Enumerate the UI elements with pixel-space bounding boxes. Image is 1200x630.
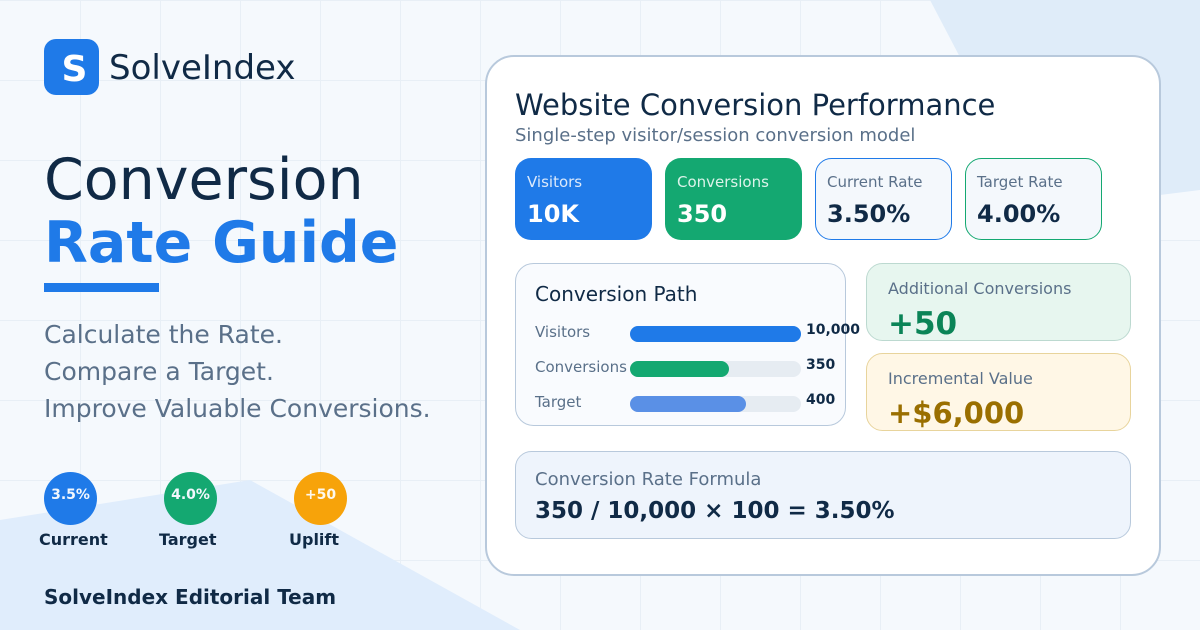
metric: conversions: 350 [677, 200, 727, 228]
stat: target: 4.0% [171, 487, 210, 503]
metric: target rate [966, 158, 1102, 240]
stat: current: 3.5% [51, 487, 90, 503]
brand name: SolveIndex [109, 48, 295, 88]
metric: current rate [816, 158, 952, 240]
icon: logo mark [44, 39, 99, 95]
bar: conversions: 350 [806, 357, 835, 373]
tagline: Improve Valuable Conversions. [44, 394, 431, 423]
tagline [44, 320, 431, 423]
panel: formula [516, 452, 1130, 538]
callout: additional conversions: Additional Conversions [888, 279, 1071, 298]
bar: target: 400 [806, 392, 835, 408]
tagline: Calculate the Rate. [44, 320, 283, 349]
panel: conversion path [516, 264, 860, 426]
bar: target [534, 392, 835, 412]
callout: incremental value: +$6,000 [888, 396, 1024, 430]
stat: target: Target [159, 530, 217, 549]
bar: visitors: Visitors [535, 323, 590, 341]
stat: target [159, 472, 217, 549]
bar: conversions: Conversions [535, 358, 627, 376]
panel subheading: Single-step visitor/session conversion model [515, 125, 915, 146]
title underline [44, 283, 159, 292]
metric: target rate: Target Rate [976, 173, 1063, 191]
icon: logo mark: S [62, 49, 87, 90]
callout: incremental value [866, 354, 1130, 430]
metric: target rate: 4.00% [977, 200, 1060, 228]
stat: uplift: +50 [305, 487, 336, 503]
stat: current [39, 472, 108, 549]
title: Rate Guide [44, 210, 398, 276]
tagline: Compare a Target. [44, 357, 274, 386]
panel: formula: Conversion Rate Formula [535, 469, 761, 490]
panel: performance card [486, 56, 1160, 575]
logo [44, 39, 295, 95]
callout: additional conversions: +50 [888, 306, 957, 342]
bar: visitors [535, 322, 860, 342]
panel: formula: 350 / 10,000 × 100 = 3.50% [535, 498, 895, 524]
title: Conversion [44, 147, 364, 213]
stat: uplift: Uplift [289, 530, 339, 549]
metric: current rate: Current Rate [827, 173, 923, 191]
metric: visitors: 10K [527, 200, 580, 228]
metric: visitors: Visitors [527, 173, 582, 191]
metric: conversions: Conversions [677, 173, 769, 191]
background shape: bottom left [0, 480, 520, 630]
metric: visitors [515, 158, 652, 240]
bar: conversions [535, 357, 835, 377]
stat: uplift [289, 472, 347, 549]
author: SolveIndex Editorial Team [44, 585, 336, 609]
panel heading: Website Conversion Performance [515, 88, 995, 122]
metric: conversions [665, 158, 802, 240]
bar: visitors: 10,000 [806, 322, 860, 338]
stat: current: Current [39, 530, 108, 549]
path heading: Conversion Path [535, 282, 697, 306]
title [44, 147, 398, 276]
metric: current rate: 3.50% [827, 200, 910, 228]
background shape: top right [930, 0, 1200, 210]
bar: target: Target [534, 393, 582, 411]
callout: additional conversions [866, 264, 1130, 342]
callout: incremental value: Incremental Value [888, 369, 1033, 388]
